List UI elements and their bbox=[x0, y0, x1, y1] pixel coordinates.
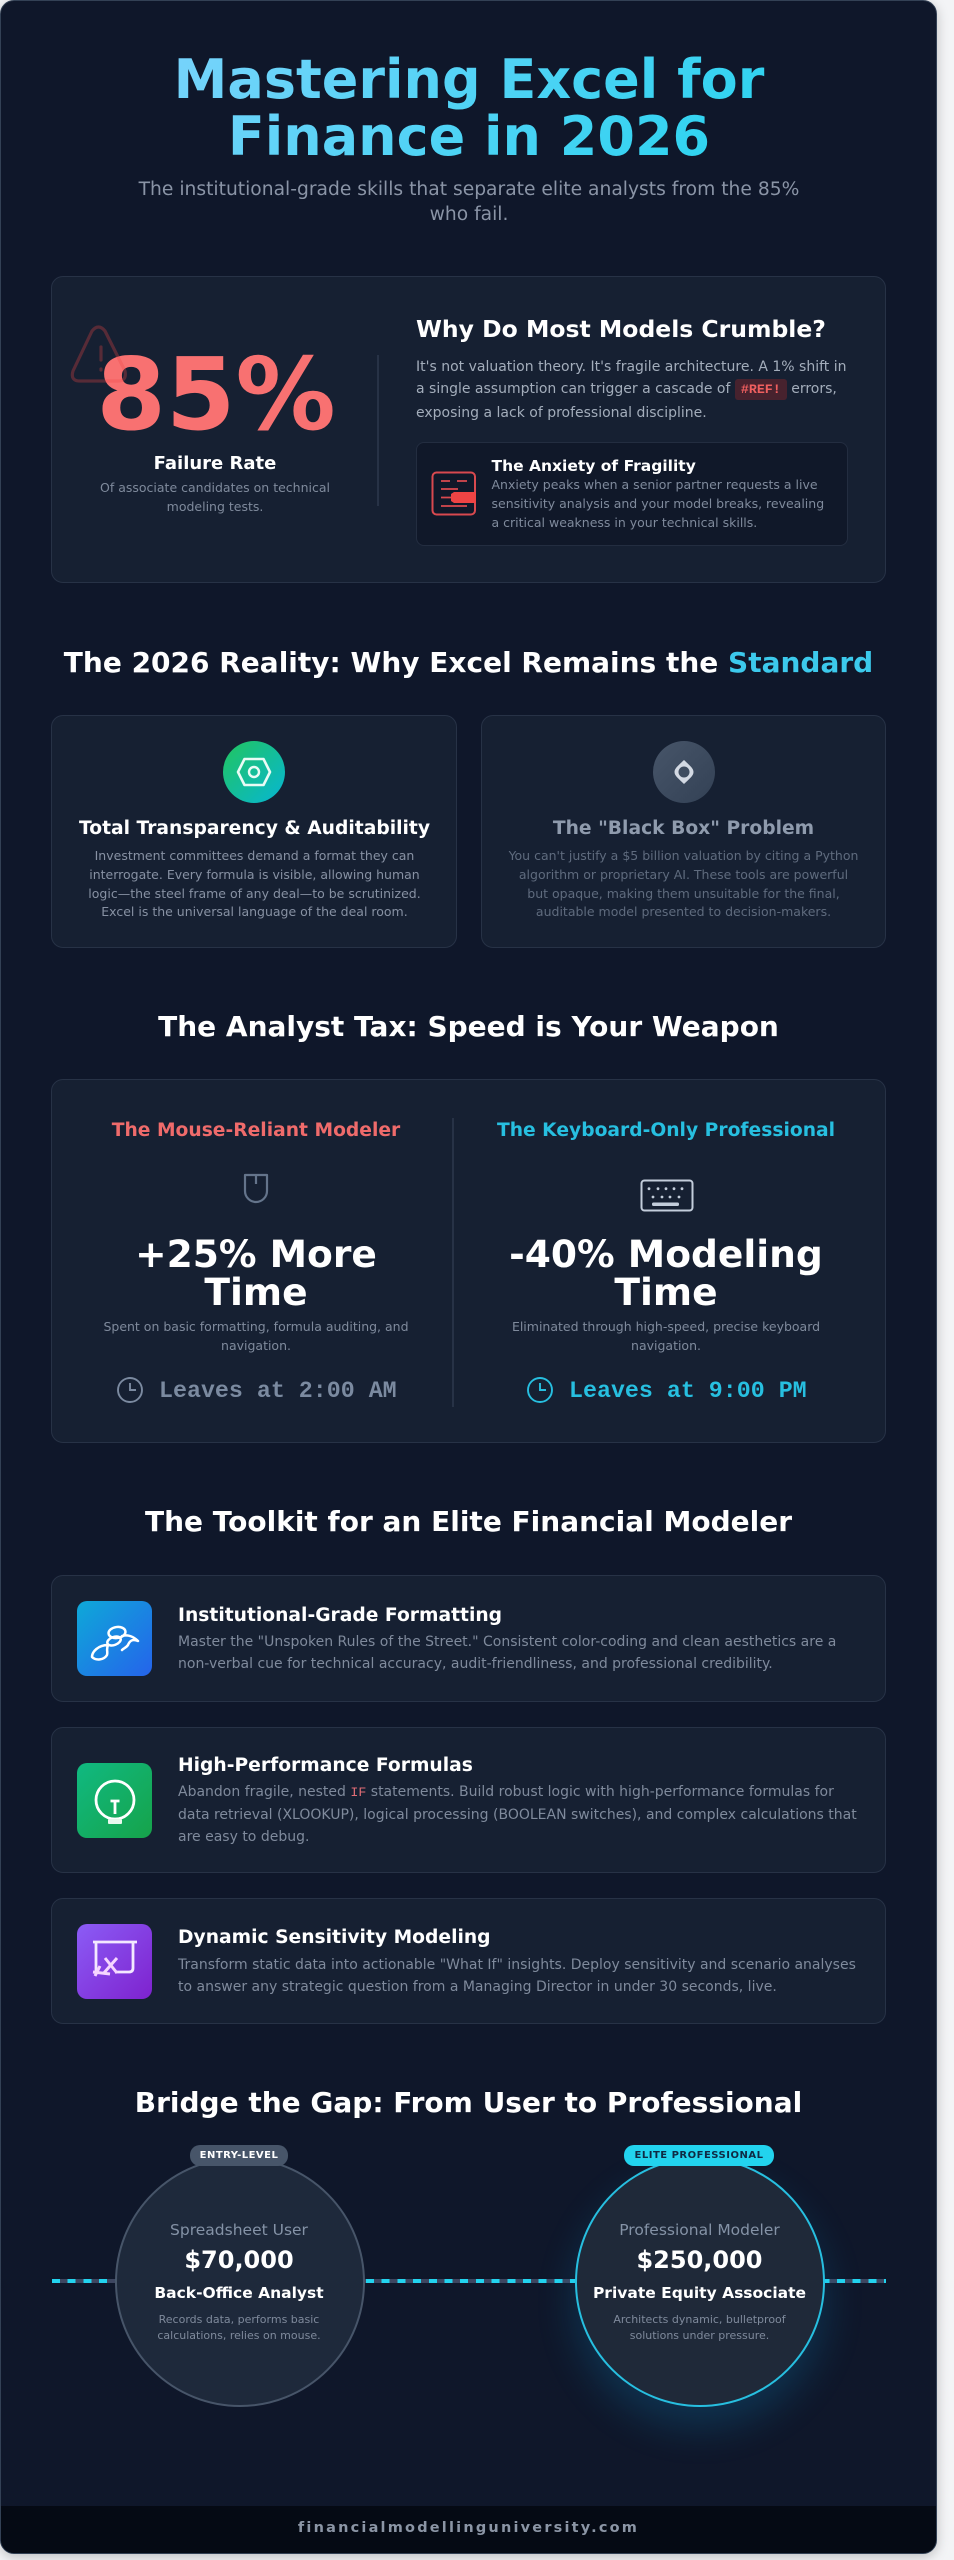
left stat text bbox=[103, 1319, 409, 1353]
tool text: Abandon fragile, nested IF statements. Build robust logic with high-performance formulas for bbox=[178, 1784, 834, 1800]
body text: fragile architecture: exposing a lack of professional discipline. bbox=[416, 405, 707, 421]
card text: auditable model presented to decision-makers. bbox=[536, 904, 831, 919]
card text: logic—the steel frame of any deal—to be scrutinized. bbox=[88, 886, 421, 901]
card text bbox=[88, 848, 421, 919]
icon: transparency hexagon bbox=[223, 741, 285, 803]
card title: The "Black Box" Problem bbox=[553, 818, 814, 839]
callout text: a critical weakness in your technical skills. bbox=[492, 515, 757, 530]
callout title: The Anxiety of Fragility bbox=[492, 457, 696, 475]
badge: elite professional bbox=[624, 2145, 774, 2166]
card title: Total Transparency & Auditability bbox=[79, 818, 430, 839]
tool text: Transform static data into actionable "What If" insights. Deploy sensitivity and scenario analyses bbox=[178, 1956, 856, 1972]
callout text: sensitivity analysis and your model breaks, revealing bbox=[492, 496, 824, 511]
role text: solutions under pressure. bbox=[630, 2329, 769, 2342]
left stat text: navigation. bbox=[221, 1338, 291, 1353]
callout: anxiety of fragility bbox=[416, 442, 848, 546]
right column title: The Keyboard-Only Professional bbox=[497, 1120, 835, 1140]
title: Mastering Excel for bbox=[174, 48, 764, 111]
salary: $70,000 bbox=[184, 2246, 294, 2274]
callout text: Anxiety peaks when a senior partner requests a live bbox=[492, 477, 818, 492]
card text: You can't justify a $5 billion valuation by citing a Python bbox=[509, 848, 858, 863]
big stat: 85%: 85% bbox=[96, 336, 336, 453]
callout text bbox=[492, 477, 824, 530]
left column title: The Mouse-Reliant Modeler bbox=[112, 1120, 400, 1140]
tool text: to answer any strategic question from a Managing Director in under 30 seconds, live. bbox=[178, 1979, 777, 1995]
left stat: +25% More bbox=[135, 1232, 377, 1276]
heading: 2026 reality: The 2026 Reality: Why Excel Remains the Standard bbox=[64, 646, 873, 679]
right stat: -40% Modeling bbox=[509, 1232, 823, 1276]
divider bbox=[377, 355, 379, 506]
stat description bbox=[100, 480, 330, 514]
left stat: Time bbox=[204, 1270, 308, 1314]
stat label: Failure Rate bbox=[154, 453, 276, 474]
subtitle: The institutional-grade skills that separate elite analysts from the 85% bbox=[139, 179, 799, 200]
left time: Leaves at 2:00 AM bbox=[159, 1378, 397, 1404]
role label: Professional Modeler bbox=[619, 2221, 780, 2239]
left stat bbox=[135, 1232, 377, 1314]
circle: elite professional bbox=[574, 2156, 824, 2406]
heading: analyst tax: The Analyst Tax: Speed is Your Weapon bbox=[158, 1010, 779, 1043]
role label: Spreadsheet User bbox=[170, 2221, 308, 2239]
tool text: non-verbal cue for technical accuracy, audit-friendliness, and professional credibility. bbox=[178, 1656, 773, 1672]
heading: why models crumble: Why Do Most Models Crumble? bbox=[416, 315, 826, 343]
subtitle: who fail. bbox=[430, 204, 508, 225]
icon: formatting bbox=[77, 1601, 152, 1676]
role text: calculations, relies on mouse. bbox=[157, 2329, 321, 2342]
footer: financialmodellinguniversity.com bbox=[298, 2520, 639, 2536]
right stat text: navigation. bbox=[631, 1338, 701, 1353]
icon: clock bbox=[117, 1377, 143, 1403]
tool title: Institutional-Grade Formatting bbox=[178, 1604, 502, 1626]
left stat text: Spent on basic formatting, formula auditing, and bbox=[103, 1319, 409, 1334]
card text: Excel is the universal language of the deal room. bbox=[101, 904, 408, 919]
icon: formulas bbox=[77, 1763, 152, 1838]
right stat text: Eliminated through high-speed, precise keyboard bbox=[512, 1319, 820, 1334]
icon: mouse bbox=[244, 1174, 268, 1204]
tool text bbox=[178, 1634, 836, 1672]
panel: black box bbox=[481, 715, 886, 948]
tool text bbox=[178, 1784, 857, 1845]
panel: speed comparison bbox=[51, 1079, 886, 1443]
card text: but opaque, making them unsuitable for the final, bbox=[527, 886, 840, 901]
card text: interrogate. Every formula is visible, allowing human bbox=[89, 867, 420, 882]
card text bbox=[508, 848, 858, 919]
body text: fragile architecture bbox=[416, 359, 846, 421]
role title: Private Equity Associate bbox=[593, 2284, 806, 2302]
role text: Architects dynamic, bulletproof bbox=[613, 2313, 786, 2326]
icon: sensitivity bbox=[77, 1924, 152, 1999]
tool text: data retrieval (XLOOKUP), logical processing (BOOLEAN switches), and complex calculations that bbox=[178, 1807, 857, 1823]
body text: fragile architecture: It's not valuation theory. It's fragile architecture. A 1% shift in bbox=[416, 359, 846, 375]
panel: formulas bbox=[51, 1727, 886, 1873]
card text: algorithm or proprietary AI. These tools are powerful bbox=[519, 867, 848, 882]
heading: bridge the gap: Bridge the Gap: From User to Professional bbox=[135, 2086, 802, 2119]
role text bbox=[613, 2313, 786, 2342]
tool text bbox=[178, 1956, 856, 1995]
role title: Back-Office Analyst bbox=[154, 2284, 324, 2302]
tool text: Master the "Unspoken Rules of the Street." Consistent color-coding and clean aesthetics are a bbox=[178, 1634, 836, 1650]
title: Finance in 2026 bbox=[228, 105, 710, 168]
right stat text bbox=[512, 1319, 820, 1353]
footer bbox=[0, 2506, 937, 2554]
tool text: are easy to debug. bbox=[178, 1829, 309, 1845]
right time: Leaves at 9:00 PM bbox=[569, 1378, 807, 1404]
role text bbox=[157, 2313, 321, 2342]
heading: toolkit: The Toolkit for an Elite Financial Modeler bbox=[145, 1505, 792, 1538]
badge: entry level bbox=[190, 2145, 288, 2166]
icon: black box bbox=[653, 741, 715, 803]
panel: failure rate bbox=[51, 276, 886, 583]
role text: Records data, performs basic bbox=[159, 2313, 319, 2326]
tool title: Dynamic Sensitivity Modeling bbox=[178, 1926, 491, 1948]
icon: keyboard bbox=[640, 1180, 694, 1212]
divider bbox=[452, 1118, 454, 1407]
badge: elite professional: ELITE PROFESSIONAL bbox=[635, 2150, 763, 2161]
panel: sensitivity bbox=[51, 1898, 886, 2024]
icon: clock bbox=[527, 1377, 553, 1403]
icon: broken document bbox=[432, 472, 476, 516]
circle: entry level bbox=[114, 2156, 364, 2406]
body text: fragile architecture: a single assumption can trigger a cascade of #REF! errors, bbox=[416, 381, 837, 397]
right stat bbox=[509, 1232, 823, 1314]
stat description: Of associate candidates on technical bbox=[100, 480, 330, 495]
icon: warning triangle bbox=[70, 325, 127, 383]
panel: formatting bbox=[51, 1575, 886, 1702]
card text: Investment committees demand a format they can bbox=[95, 848, 414, 863]
right stat: Time bbox=[614, 1270, 718, 1314]
salary: $250,000 bbox=[636, 2246, 762, 2274]
panel: transparency bbox=[51, 715, 457, 948]
badge: entry level: ENTRY-LEVEL bbox=[200, 2150, 278, 2161]
tool title: High-Performance Formulas bbox=[178, 1754, 473, 1776]
dashed connector bbox=[52, 2279, 886, 2283]
stat description: modeling tests. bbox=[167, 499, 263, 514]
subtitle bbox=[138, 179, 799, 225]
title bbox=[119, 52, 819, 165]
